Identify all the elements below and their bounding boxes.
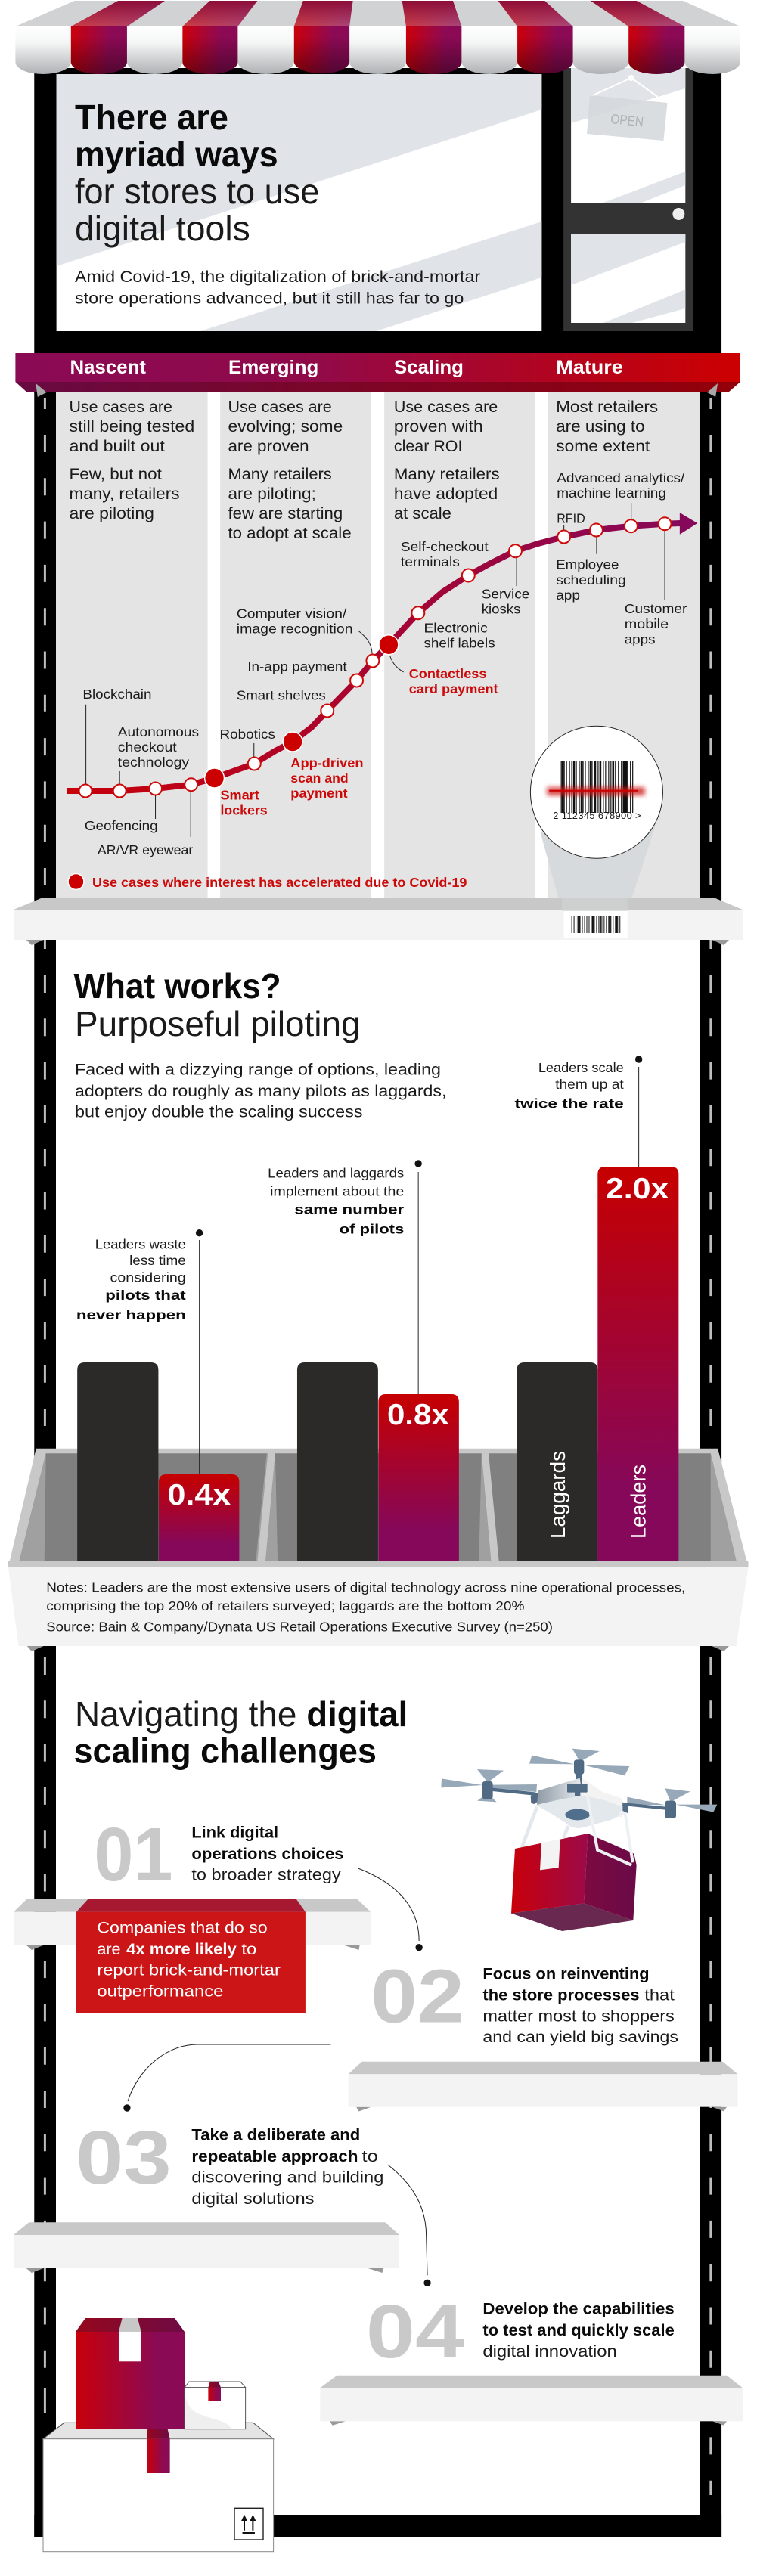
barcode scanner illustration (530, 726, 662, 911)
accelerated curve labels (220, 666, 498, 818)
leaders bar 0.4x (159, 1474, 239, 1561)
step 02: 02 (371, 1954, 464, 2038)
accelerated curve labels: Contactless (409, 666, 486, 681)
step 01 (94, 1813, 344, 1897)
white backing of shelving (56, 392, 700, 2515)
drone rotors (441, 1749, 717, 1812)
callout: same number of pilots: of pilots (340, 1222, 404, 1237)
column text: scaling: have adopted (394, 485, 498, 503)
stage labels: Mature (556, 357, 623, 378)
column text: mature: Most retailers (556, 398, 658, 416)
curve labels: Electronic (424, 621, 488, 636)
column text: emerging: few are starting (228, 505, 343, 522)
step 03: 03 (76, 2116, 172, 2200)
heading: navigating challenges: Navigating the (75, 1694, 296, 1734)
maturity curve (67, 470, 697, 857)
connector 02 to 03 (123, 2044, 330, 2112)
step 02: and can yield big savings (482, 2029, 678, 2046)
callout: pilots that never happen: less time (129, 1253, 186, 1268)
callout: twice the rate: them up at (555, 1077, 624, 1092)
laggards bars (77, 1362, 597, 1561)
bar values: 2.0x (606, 1173, 669, 1205)
callout text: 4x more likely (126, 1941, 237, 1958)
step 03: discovering and building (191, 2169, 383, 2187)
drone front straps (588, 1796, 633, 1865)
callout text: are (97, 1941, 121, 1958)
shelf 03 (14, 2222, 399, 2273)
step 01: operations choices (191, 1846, 344, 1863)
leaders bar 2.0x (597, 1167, 678, 1561)
title: digital tools (75, 209, 250, 248)
column text: emerging: Use cases are (228, 398, 332, 416)
column text: mature (556, 398, 658, 455)
column text: scaling (394, 398, 500, 522)
column text: nascent: are piloting (70, 505, 154, 522)
curve labels: Robotics (219, 727, 275, 742)
notes and source (46, 1580, 685, 1635)
stage banner (15, 353, 740, 397)
column text: scaling: at scale (394, 505, 451, 522)
curve labels: app (556, 587, 580, 603)
callout: twice the rate: twice the rate (514, 1096, 624, 1111)
step 03: Take a deliberate and (191, 2127, 360, 2144)
step 03: repeatable approach (191, 2148, 358, 2165)
curve labels: Geofencing (85, 818, 158, 833)
curve labels: Advanced analytics/ (557, 470, 684, 485)
barcode: 2 112345 678900 > (553, 810, 641, 821)
curve labels: mobile (625, 616, 669, 631)
step 04: to test and quickly scale (482, 2322, 675, 2339)
shop door (563, 68, 693, 331)
curve labels: Computer vision/ (237, 606, 346, 622)
stage labels: Scaling (394, 357, 464, 378)
shelf 02 (349, 2062, 737, 2111)
step 02: the store processes (482, 1987, 640, 2004)
callout: pilots that never happen: pilots that (105, 1288, 186, 1303)
column text: emerging (228, 398, 352, 542)
curve labels: apps (625, 632, 656, 647)
step 04: digital innovation (482, 2343, 617, 2361)
step 01: 01 (94, 1813, 173, 1897)
callout: pilots that never happen: never happen (76, 1307, 186, 1322)
icon: stack of boxes (43, 2318, 274, 2552)
storage bin front with notes (8, 1561, 748, 1651)
column text: mature: are using to (556, 418, 645, 436)
heading: navigating challenges: scaling challenges (73, 1731, 377, 1771)
step 04: Develop the capabilities (482, 2301, 675, 2318)
storage bin back (8, 1449, 748, 1567)
curve labels (82, 470, 687, 857)
step 03: digital solutions (191, 2190, 315, 2208)
column text: nascent (70, 398, 194, 522)
curve labels: image recognition (237, 622, 353, 637)
callout text (97, 1920, 281, 2001)
curve labels: machine learning (557, 485, 666, 501)
delivery parcel (511, 1834, 637, 1931)
column text: scaling: clear ROI (394, 438, 462, 455)
title: for stores to use (75, 172, 319, 211)
step 03 (76, 2116, 383, 2208)
title: myriad ways (75, 135, 278, 174)
callout text: report brick-and-mortar (97, 1962, 281, 1979)
step 02: that (644, 1987, 675, 2004)
bar series labels: Leaders (627, 1465, 650, 1539)
intro text (75, 268, 480, 308)
large box tape (147, 2429, 170, 2473)
drone body (535, 1778, 622, 1828)
column text: emerging: Many retailers (228, 466, 332, 483)
curve labels: Autonomous (118, 724, 199, 739)
column text: scaling: Use cases are (394, 398, 498, 416)
shop window (57, 74, 541, 331)
piloting paragraph: adopters do roughly as many pilots as laggards, (75, 1083, 446, 1100)
accelerated curve labels: card payment (409, 681, 498, 696)
column text: scaling: proven with (394, 418, 483, 436)
column text: emerging: are proven (228, 438, 309, 455)
accelerated curve labels: scan and (290, 770, 349, 786)
callout: same number of pilots: Leaders and laggards (268, 1166, 405, 1181)
column text: nascent: many, retailers (70, 485, 179, 503)
column text: emerging: evolving; some (228, 418, 343, 436)
intro text: Amid Covid-19, the digitalization of brick-and-mortar (75, 268, 480, 286)
shelf with barcode label (14, 898, 743, 945)
callout: 4x more likely (76, 1899, 306, 2013)
red box (76, 2318, 185, 2429)
large white box (43, 2423, 274, 2552)
use case markers (79, 517, 672, 797)
shelf 04 (320, 2376, 743, 2426)
heading: what works: What works? (73, 966, 281, 1006)
callout: twice the rate (514, 1056, 642, 1167)
callout: same number of pilots: same number (294, 1202, 405, 1217)
curve labels: kiosks (482, 602, 521, 617)
piloting paragraph: Faced with a dizzying range of options, leading (75, 1062, 441, 1079)
curve labels: Service (482, 587, 529, 602)
accelerated use case markers (205, 635, 399, 788)
bar values (168, 1173, 669, 1511)
curve labels: Employee (556, 557, 619, 572)
connector 01 to 02 (358, 1868, 423, 1951)
callout text: outperformance (97, 1983, 223, 2001)
heading: what works: Purposeful piloting (75, 1004, 361, 1043)
callout: pilots that never happen: considering (110, 1270, 186, 1285)
callout: pilots that never happen: Leaders waste (95, 1237, 186, 1252)
bar series labels: Laggards (546, 1451, 569, 1539)
accelerated curve labels: lockers (220, 803, 268, 818)
icon: delivery drone (441, 1749, 717, 1931)
curve labels: In-app payment (247, 659, 347, 674)
curve labels: RFID (557, 511, 585, 526)
column text: emerging: are piloting; (228, 485, 316, 503)
column text: scaling: Many retailers (394, 466, 500, 483)
column text: nascent: Use cases are (70, 398, 172, 416)
arrow head (680, 513, 697, 535)
leader lines (86, 503, 665, 837)
this way up symbol (234, 2508, 263, 2540)
curve labels: terminals (401, 554, 460, 569)
piloting paragraph (75, 1062, 446, 1121)
accelerated curve labels: Smart (220, 788, 259, 803)
step 01: to broader strategy (191, 1867, 341, 1884)
heading: navigating challenges: digital (306, 1694, 408, 1734)
step 02: Focus on reinventing (482, 1966, 650, 1983)
door knob (672, 208, 684, 220)
notes and source: Notes: Leaders are the most extensive users of digital technology across nine operational processes, (46, 1580, 685, 1595)
curve labels: scheduling (556, 572, 626, 587)
intro text: store operations advanced, but it still has far to go (75, 290, 464, 308)
bar series labels (546, 1451, 650, 1539)
connector 03 to 04 (388, 2165, 431, 2286)
scan beam (547, 787, 645, 795)
curve labels: shelf labels (424, 636, 495, 651)
curve labels: Customer (625, 601, 687, 616)
notes and source: Source: Bain & Company/Dynata US Retail Operations Executive Survey (n=250) (46, 1620, 553, 1635)
notes and source: comprising the top 20% of retailers surveyed; laggards are the bottom 20% (46, 1598, 524, 1613)
maturity columns (56, 392, 700, 898)
stage labels (70, 357, 623, 378)
leaders bar 0.8x (378, 1394, 459, 1561)
bar values: 0.8x (387, 1399, 449, 1431)
shelf 01 (14, 1899, 371, 1950)
callout text: to (241, 1941, 256, 1958)
small white box (185, 2382, 246, 2429)
stage labels: Nascent (70, 357, 146, 378)
barcode (553, 761, 641, 821)
shelf barcode label (564, 911, 628, 938)
open sign: OPEN (610, 111, 644, 130)
legend: Use cases where interest has accelerated due to Covid-19 (92, 875, 467, 890)
curve labels: Blockchain (82, 687, 151, 702)
title: There are (75, 98, 228, 137)
awning (15, 1, 740, 74)
curve labels: Smart shelves (237, 688, 326, 703)
column text: emerging: to adopt at scale (228, 525, 352, 542)
curve labels: checkout (118, 739, 177, 755)
callout: pilots that never happen (76, 1229, 203, 1474)
step 04: 04 (366, 2290, 464, 2374)
step 02 (371, 1954, 678, 2046)
bar values: 0.4x (168, 1479, 231, 1511)
callout: twice the rate: Leaders scale (538, 1060, 624, 1075)
title (75, 98, 319, 248)
curve labels: AR/VR eyewear (98, 842, 193, 857)
column text: mature: some extent (556, 438, 650, 455)
accelerated curve labels: payment (290, 786, 348, 801)
piloting paragraph: but enjoy double the scaling success (75, 1104, 363, 1121)
column text: nascent: Few, but not (70, 466, 162, 483)
heading: navigating challenges (73, 1694, 408, 1771)
column text: nascent: and built out (70, 438, 165, 455)
step 01: Link digital (191, 1824, 278, 1842)
drone rear legs (522, 1807, 569, 1847)
heading: what works (73, 966, 361, 1043)
accelerated curve labels: App-driven (290, 755, 364, 770)
callout: same number of pilots (268, 1160, 422, 1394)
callout text: Companies that do so (97, 1920, 268, 1937)
step 03: to (362, 2148, 378, 2165)
step 04 (366, 2290, 675, 2374)
bar chart: leaders vs laggards (77, 1167, 678, 1561)
column text: nascent: still being tested (70, 418, 194, 436)
drone arms and motors (482, 1759, 676, 1818)
curve labels: technology (118, 755, 190, 770)
stage labels: Emerging (228, 357, 318, 378)
open sign (587, 75, 667, 141)
step 02: matter most to shoppers (482, 2007, 675, 2025)
curve labels: Self-checkout (401, 539, 489, 554)
callout: same number of pilots: implement about the (270, 1184, 404, 1199)
